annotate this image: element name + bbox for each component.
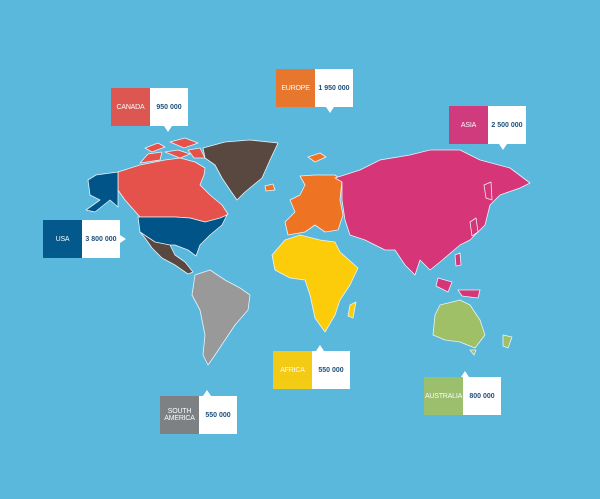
label: australia: 800 000 bbox=[469, 392, 495, 400]
continent: usa bbox=[86, 172, 227, 256]
continent: asia bbox=[335, 150, 530, 298]
label: south america: 550 000 bbox=[205, 412, 231, 418]
continent: australia bbox=[433, 300, 512, 355]
label: europe bbox=[276, 69, 353, 113]
label: africa bbox=[273, 345, 350, 389]
label: australia: AUSTRALIA bbox=[425, 392, 462, 400]
label: usa: USA bbox=[56, 236, 69, 242]
label: europe: 1 950 000 bbox=[318, 84, 350, 92]
continent: africa bbox=[272, 235, 358, 332]
label: asia bbox=[449, 106, 526, 150]
label: canada bbox=[111, 88, 188, 132]
continent: south america bbox=[192, 270, 250, 365]
label: south america bbox=[160, 390, 237, 434]
continent: mexico bbox=[140, 232, 193, 274]
label: africa: 550 000 bbox=[318, 366, 344, 374]
label: canada: CANADA bbox=[116, 104, 144, 110]
continent: europe bbox=[265, 153, 343, 235]
continent: canada bbox=[118, 138, 228, 222]
label: canada: 950 000 bbox=[156, 104, 182, 110]
label: europe: EUROPE bbox=[281, 84, 310, 92]
continent: greenland bbox=[203, 140, 278, 200]
label: south america: SOUTH bbox=[168, 408, 191, 415]
label: australia bbox=[424, 371, 501, 415]
label: south america: AMERICA bbox=[164, 415, 195, 422]
label: usa: 3 800 000 bbox=[85, 236, 117, 242]
label: africa: AFRICA bbox=[280, 366, 305, 374]
label: asia: ASIA bbox=[461, 122, 476, 128]
label: asia: 2 500 000 bbox=[491, 122, 523, 128]
label: usa bbox=[43, 220, 126, 258]
